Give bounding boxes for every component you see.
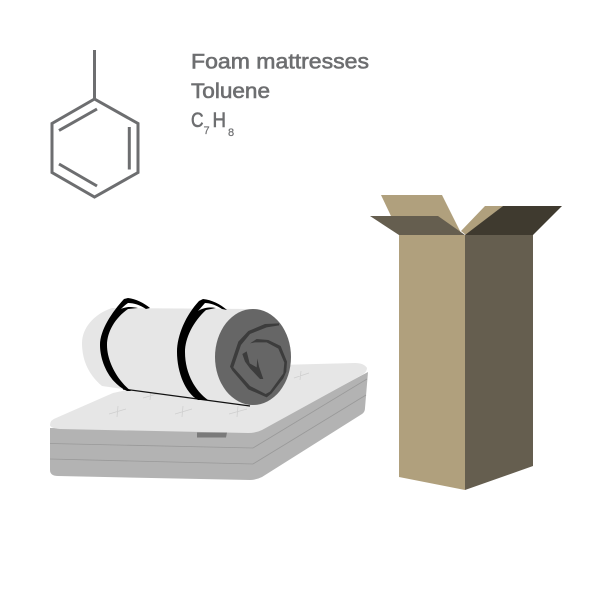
- text: toluene: Toluene: [191, 80, 270, 103]
- text: chemical formula: 7: [204, 125, 210, 137]
- mattress tufting: [109, 371, 309, 417]
- mattress side: [50, 372, 368, 480]
- roll end face: [215, 309, 291, 405]
- back left flap: [381, 195, 461, 235]
- front left flap: [370, 216, 465, 235]
- heading: foam mattresses: Foam mattresses: [191, 50, 369, 74]
- mattress label: [197, 432, 227, 438]
- strap: left: [100, 298, 150, 391]
- illustration: mattress: [50, 363, 368, 480]
- mattress top: [50, 363, 367, 433]
- roll spiral: [230, 323, 287, 397]
- strap: right: [177, 299, 227, 400]
- text: chemical formula: [191, 109, 234, 139]
- text: chemical formula: C: [191, 109, 204, 132]
- illustration: cardboard box: [370, 195, 562, 490]
- mattress seams: [50, 379, 367, 464]
- text: chemical formula: H: [212, 109, 226, 132]
- roll body: [82, 308, 253, 405]
- left face: [399, 235, 465, 490]
- bottom edge of roll: [123, 389, 250, 406]
- back right flap: [461, 206, 503, 235]
- illustration: rolled mattress: [82, 298, 291, 406]
- icon: toluene molecule: [52, 50, 138, 197]
- right flap: [465, 206, 562, 235]
- right face: [465, 235, 533, 490]
- text: chemical formula: 8: [228, 127, 234, 139]
